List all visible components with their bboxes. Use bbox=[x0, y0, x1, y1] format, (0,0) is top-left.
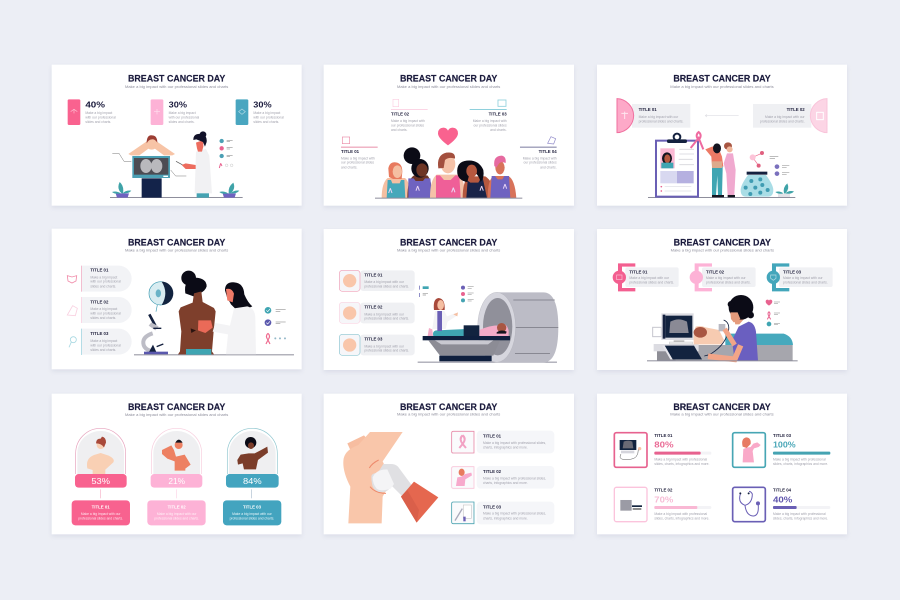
metric: title 01, 80% bbox=[614, 433, 711, 467]
item: title 02: professional slides and charts. bbox=[364, 317, 409, 321]
subtitle: Make a big impact with our professional slides and charts bbox=[397, 248, 501, 252]
title: BREAST CANCER DAY bbox=[400, 238, 497, 248]
legend icons bbox=[766, 300, 780, 326]
panel: slide 2, four titles and women bbox=[324, 65, 574, 206]
panel: slide 4, self examination bbox=[52, 229, 302, 369]
illustration: doctor bbox=[432, 298, 458, 331]
item: title 02: TITLE 02 bbox=[90, 300, 109, 305]
item: title 01: professional slides and charts. bbox=[364, 284, 409, 288]
item: title 03: TITLE 03 bbox=[783, 270, 802, 275]
subtitle: Make a big impact with our professional slides and charts bbox=[397, 413, 501, 417]
subtitle: Make a big impact with our professional slides and charts bbox=[397, 85, 501, 89]
item: title 03 bbox=[339, 334, 415, 355]
item: title 04: TITLE 04 bbox=[539, 149, 557, 154]
stat 30% pink bbox=[151, 99, 199, 125]
item: title 01: slides and charts. bbox=[90, 284, 116, 288]
item: title 03: TITLE 03 bbox=[90, 331, 109, 336]
item: title 03: TITLE 03 bbox=[489, 112, 507, 117]
panel: slide 9, progress bars bbox=[597, 394, 847, 534]
item: title 02: and charts. bbox=[391, 128, 408, 132]
item: title 01: Make a big impact with professional slides, bbox=[483, 441, 546, 445]
stat 30% teal: slides and charts. bbox=[253, 120, 279, 124]
column: 21%: professional slides and charts. bbox=[154, 516, 199, 520]
column: 53%: TITLE 01 bbox=[92, 505, 110, 510]
subtitle: Make a big impact with our professional slides and charts bbox=[670, 85, 774, 89]
item: title 02: Make a big impact bbox=[90, 307, 117, 311]
illustration: clipboard bbox=[648, 132, 795, 198]
panel: slide 8, clinical breast exam bbox=[324, 394, 574, 534]
item: title 03: TITLE 03 bbox=[483, 504, 502, 509]
item: title 01: TITLE 01 bbox=[341, 149, 360, 154]
illustration: x-ray examination bbox=[110, 131, 243, 198]
item: title 02: TITLE 02 bbox=[706, 270, 725, 275]
item: title 01 bbox=[613, 263, 679, 291]
icon: heart bbox=[438, 128, 458, 145]
metric: title 04, 40%: Make a big impact with professional bbox=[773, 512, 826, 516]
title: BREAST CANCER DAY bbox=[400, 402, 497, 412]
stat 40%: slides and charts. bbox=[85, 120, 111, 124]
item: title 01: Make a big impact with our bbox=[364, 280, 405, 284]
column: 84%: 84% bbox=[243, 476, 262, 486]
item: title 01: and charts. bbox=[341, 165, 358, 169]
illustration: two women bbox=[705, 142, 736, 197]
item: title 03 bbox=[451, 501, 554, 525]
stat 30% pink: with our professional bbox=[169, 115, 199, 119]
item: title 01: our professional slides bbox=[341, 161, 374, 165]
subtitle: Make a big impact with our professional slides and charts bbox=[671, 248, 774, 252]
item: title 02: Make a big impact with our bbox=[706, 276, 746, 280]
item: title 02 bbox=[451, 466, 554, 489]
item: title 03: Make a big impact with professional slides, bbox=[483, 512, 546, 516]
item: title 03: professional slides and charts. bbox=[364, 349, 409, 353]
panel: slide 3, two titles and clipboard bbox=[597, 65, 847, 206]
title: BREAST CANCER DAY bbox=[400, 74, 497, 84]
item: title 02: Make a big impact with our bbox=[364, 312, 405, 316]
item: title 03: professional slides and charts. bbox=[783, 280, 828, 284]
title: BREAST CANCER DAY bbox=[128, 238, 225, 248]
illustration: examination close-up bbox=[343, 432, 438, 523]
metric: title 03, 100%: 100% bbox=[773, 440, 796, 450]
item: title 03: charts, infographics and more. bbox=[483, 516, 528, 520]
illustration: doctor bbox=[213, 282, 256, 354]
legend bbox=[420, 286, 474, 302]
column: 84%: professional slides and charts. bbox=[230, 516, 274, 520]
subtitle: Make a big impact with our professional slides and charts bbox=[125, 413, 229, 417]
item: title 03: Make a big impact with bbox=[473, 119, 507, 123]
item: title 02: our professional slides bbox=[391, 123, 424, 127]
title: BREAST CANCER DAY bbox=[673, 402, 771, 412]
illustration: five women bbox=[375, 147, 522, 199]
column: 84%: Make a big impact with our bbox=[232, 512, 273, 516]
card: title 01: professional slides and charts. bbox=[639, 120, 684, 124]
card: title 01: TITLE 01 bbox=[639, 107, 657, 112]
item: title 02: Make a big impact with professional slides, bbox=[483, 476, 546, 480]
metric: title 01, 80%: TITLE 01 bbox=[654, 433, 673, 438]
item: title 03: Make a big impact with our bbox=[364, 344, 405, 348]
illustration: jar and molecules bbox=[741, 151, 794, 197]
metric: title 02, 70%: Make a big impact with professional bbox=[654, 512, 707, 516]
card: title 01 bbox=[617, 99, 690, 133]
item: title 03 bbox=[69, 329, 132, 355]
card: title 01: Make a big impact with our bbox=[639, 115, 679, 119]
metric: title 04, 40%: TITLE 04 bbox=[773, 487, 792, 492]
item: title 01: professional slides and charts. bbox=[629, 280, 674, 284]
item: title 03: Make a big impact bbox=[90, 339, 117, 343]
item: title 04: our professional slides bbox=[524, 161, 557, 165]
subtitle: Make a big impact with our professional slides and charts bbox=[125, 249, 229, 253]
column: 53%: 53% bbox=[91, 476, 110, 486]
item: title 02: slides and charts. bbox=[90, 316, 116, 320]
illustration: MRI machine bbox=[418, 292, 558, 363]
metric: title 02, 70% bbox=[614, 487, 711, 522]
item: title 02: with our professional bbox=[90, 311, 121, 315]
metric: title 03, 100%: TITLE 03 bbox=[773, 433, 792, 438]
stat 40%: 40% bbox=[85, 99, 105, 109]
item: title 01: charts, infographics and more. bbox=[483, 446, 528, 450]
stat 30% pink: 30% bbox=[169, 99, 187, 109]
item: title 01: with our professional bbox=[90, 280, 121, 284]
column: 21%: Make a big impact with our bbox=[157, 512, 197, 516]
panel: slide 5, MRI scanner bbox=[324, 229, 574, 370]
metric: title 02, 70%: TITLE 02 bbox=[654, 487, 673, 492]
item: title 02: TITLE 02 bbox=[364, 305, 383, 310]
stat 30% teal: 30% bbox=[253, 99, 272, 109]
item: title 03: our professional slides bbox=[474, 123, 507, 127]
stat 40%: Make a big impact bbox=[85, 111, 112, 115]
item: title 01 bbox=[341, 137, 378, 169]
item: title 02: professional slides and charts. bbox=[706, 280, 751, 284]
metric: title 01, 80%: slides, charts, infographics and more. bbox=[654, 462, 710, 466]
column: 53%: Make a big impact with our bbox=[81, 512, 121, 516]
item: title 02: charts, infographics and more. bbox=[483, 481, 528, 485]
metric: title 02, 70%: 70% bbox=[654, 494, 674, 504]
column: 21%: TITLE 02 bbox=[168, 505, 186, 510]
illustration: patient bbox=[178, 271, 216, 355]
column: 21% bbox=[147, 428, 206, 525]
panel: slide 6, ultrasound bbox=[597, 229, 847, 370]
metric: title 02, 70%: slides, charts, infographics and more. bbox=[654, 516, 710, 520]
stat 30% pink: Make a big impact bbox=[169, 111, 196, 115]
item: title 01: TITLE 01 bbox=[90, 268, 109, 273]
item: title 01 bbox=[67, 266, 132, 292]
item: title 02: Make a big impact with bbox=[391, 119, 425, 123]
item: title 01: TITLE 01 bbox=[483, 434, 502, 439]
item: title 03: TITLE 03 bbox=[364, 337, 383, 342]
item: title 02: TITLE 02 bbox=[391, 112, 410, 117]
stat 40% bbox=[68, 99, 116, 125]
item: title 03 bbox=[767, 263, 833, 291]
stat 30% teal: Make a big impact bbox=[253, 111, 280, 115]
stat 30% pink: slides and charts. bbox=[169, 120, 195, 124]
panel: slide 1, statistics and x-ray bbox=[52, 65, 302, 206]
item: title 01: Make a big impact bbox=[90, 275, 117, 279]
illustration: ultrasound scene bbox=[647, 295, 798, 361]
subtitle: Make a big impact with our professional slides and charts bbox=[125, 85, 229, 89]
item: title 01: Make a big impact with bbox=[341, 156, 375, 160]
item: title 02 bbox=[690, 263, 756, 291]
item: title 03 bbox=[470, 100, 507, 132]
stat 30% teal bbox=[236, 99, 284, 125]
metric: title 04, 40%: 40% bbox=[773, 494, 793, 504]
item: title 04: and charts. bbox=[540, 165, 557, 169]
item: title 01: Make a big impact with our bbox=[629, 276, 670, 280]
metric: title 01, 80%: Make a big impact with professional bbox=[654, 457, 707, 461]
metric: title 03, 100% bbox=[733, 433, 830, 467]
item: title 01 bbox=[339, 270, 415, 291]
column: 21%: 21% bbox=[168, 476, 185, 486]
illustration: magnifier and microscope bbox=[134, 282, 294, 355]
item: title 03: Make a big impact with our bbox=[783, 276, 823, 280]
item: title 04: Make a big impact with bbox=[523, 156, 557, 160]
item: title 02 bbox=[391, 99, 428, 132]
checklist bbox=[265, 307, 286, 344]
metric: title 03, 100%: slides, charts, infographics and more. bbox=[773, 462, 828, 466]
metric: title 04, 40% bbox=[733, 487, 830, 522]
item: title 04 bbox=[520, 137, 557, 169]
card: title 02 bbox=[753, 99, 827, 133]
item: title 03: slides and charts. bbox=[90, 348, 116, 352]
column: 84%: TITLE 03 bbox=[243, 505, 262, 510]
column: 53%: professional slides and charts. bbox=[78, 516, 123, 520]
item: title 02 bbox=[67, 297, 132, 323]
stat 30% teal: with our professional bbox=[253, 115, 284, 119]
item: title 01: TITLE 01 bbox=[364, 272, 383, 277]
arrow bbox=[705, 114, 739, 117]
column: 53% bbox=[72, 428, 130, 525]
metric: title 04, 40%: slides, charts, infographics and more. bbox=[773, 516, 828, 520]
item: title 01: TITLE 01 bbox=[629, 270, 648, 275]
metric: title 03, 100%: Make a big impact with professional bbox=[773, 457, 826, 461]
subtitle: Make a big impact with our professional slides and charts bbox=[670, 413, 774, 417]
item: title 01 bbox=[451, 431, 554, 454]
card: title 02: Make a big impact with our bbox=[765, 115, 806, 119]
item: title 03: with our professional bbox=[90, 343, 121, 347]
item: title 02: TITLE 02 bbox=[483, 469, 502, 474]
item: title 03: and charts. bbox=[490, 128, 507, 132]
title: BREAST CANCER DAY bbox=[673, 74, 771, 84]
column: 84% bbox=[223, 428, 281, 525]
metric: title 01, 80%: 80% bbox=[654, 440, 674, 450]
card: title 02: professional slides and charts. bbox=[760, 120, 805, 124]
title: BREAST CANCER DAY bbox=[128, 402, 225, 412]
item: title 02 bbox=[339, 302, 415, 323]
card: title 02: TITLE 02 bbox=[787, 107, 805, 112]
stat 40%: with our professional bbox=[85, 115, 116, 119]
title: BREAST CANCER DAY bbox=[674, 238, 771, 248]
panel: slide 7, percentage arches bbox=[52, 394, 302, 534]
title: BREAST CANCER DAY bbox=[128, 74, 225, 84]
